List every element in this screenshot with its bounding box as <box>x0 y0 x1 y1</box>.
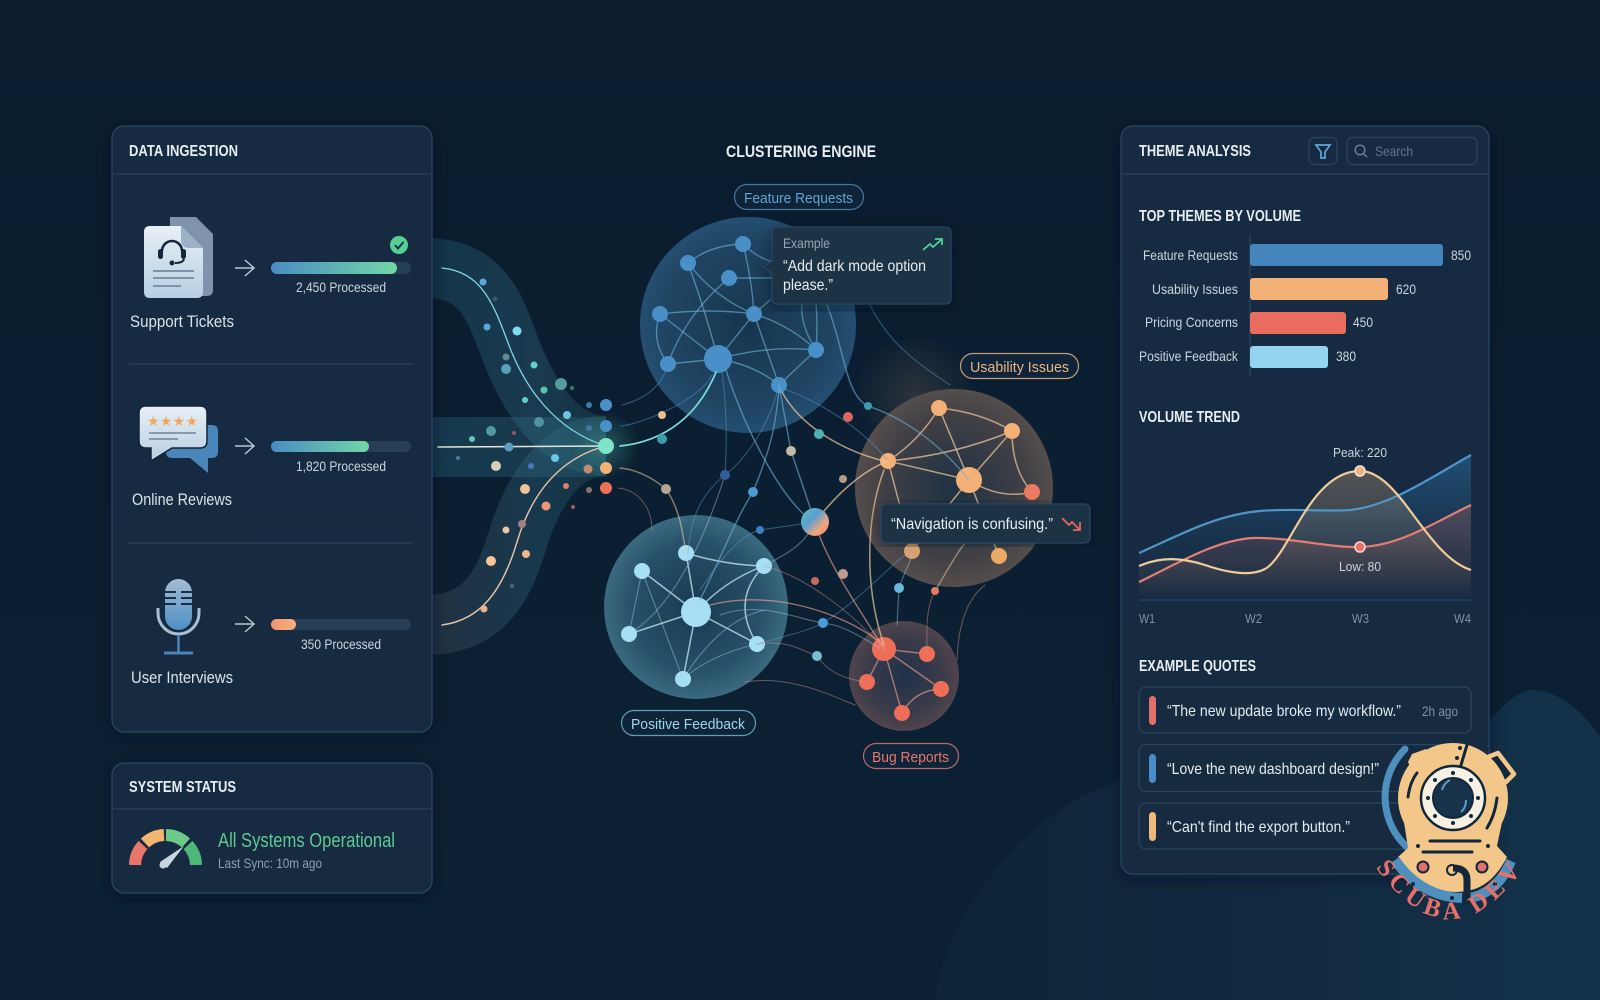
line chart: Peak: 220 <box>1333 445 1387 460</box>
quote card: export: “Can't find the export button.” <box>1167 819 1350 836</box>
callout: navigation quote: “Navigation is confusing.” <box>891 516 1053 533</box>
progress bar <box>271 441 411 452</box>
pill: feature requests: Feature Requests <box>744 190 853 207</box>
icon: trend down <box>1062 518 1080 530</box>
heading: volume trend: VOLUME TREND <box>1139 409 1240 426</box>
connecting links <box>618 305 985 705</box>
count: 2,450 Processed <box>296 279 386 295</box>
quote card: workflow: 2h ago <box>1422 703 1458 719</box>
heading: system status: SYSTEM STATUS <box>129 779 236 796</box>
icon: review bubbles <box>139 406 218 473</box>
heading: example quotes: EXAMPLE QUOTES <box>1139 658 1256 675</box>
progress bar <box>271 262 411 274</box>
pill: positive feedback: Positive Feedback <box>631 716 745 733</box>
callout: navigation quote <box>881 504 1090 543</box>
line chart: Low: 80 <box>1339 559 1381 574</box>
panel: data ingestion <box>112 126 432 732</box>
line chart: W3 <box>1352 611 1369 626</box>
bar chart <box>1139 235 1471 377</box>
pill: feature requests <box>734 184 864 210</box>
panel: system status <box>112 763 432 893</box>
callout: example quote: “Add dark mode option <box>783 258 926 275</box>
label: Online Reviews <box>132 490 232 509</box>
line chart <box>1139 445 1471 626</box>
status text: All Systems Operational <box>218 830 395 852</box>
callout: example quote: Example <box>783 235 830 251</box>
status check icon <box>390 236 408 254</box>
quote card: workflow <box>1139 687 1471 733</box>
bar chart: 380 <box>1336 348 1356 364</box>
search box <box>1347 138 1477 164</box>
heading: top themes: TOP THEMES BY VOLUME <box>1139 208 1301 225</box>
quote card: dashboard: “Love the new dashboard design!” <box>1167 761 1379 778</box>
cluster: usability issues <box>855 335 1053 587</box>
callout: example quote <box>764 227 951 304</box>
quote card: dashboard <box>1139 744 1471 792</box>
bar chart: 620 <box>1396 281 1416 297</box>
label: User Interviews <box>131 668 233 687</box>
source: support tickets <box>130 217 411 331</box>
icon: trend up <box>923 239 942 250</box>
logo: scuba dev helmet <box>1377 743 1516 920</box>
arrow <box>235 260 254 276</box>
cluster: positive feedback <box>604 475 788 699</box>
bar chart: 450 <box>1353 314 1373 330</box>
bar chart: Pricing Concerns <box>1145 314 1238 330</box>
pill: usability issues <box>960 354 1078 378</box>
count: 350 Processed <box>301 636 381 652</box>
label: Support Tickets <box>130 312 234 331</box>
filter button <box>1309 138 1337 164</box>
line chart: W1 <box>1139 611 1155 626</box>
bar chart: Feature Requests <box>1143 247 1238 263</box>
line chart: W4 <box>1454 611 1471 626</box>
icon: gauge <box>135 835 196 868</box>
pill: usability issues: Usability Issues <box>970 359 1069 376</box>
bar chart: 850 <box>1451 247 1471 263</box>
pill: bug reports: Bug Reports <box>872 749 949 766</box>
callout: example quote: please.” <box>783 277 833 294</box>
heading: data ingestion: DATA INGESTION <box>129 143 238 160</box>
source: online reviews <box>132 406 411 509</box>
multicolor junction node <box>801 508 829 536</box>
search box: Search <box>1375 143 1413 159</box>
bar chart: Usability Issues <box>1152 281 1238 297</box>
pill: positive feedback <box>622 710 756 736</box>
bar chart: Positive Feedback <box>1139 348 1239 364</box>
panel: theme analysis <box>1121 126 1489 874</box>
quote card: workflow: “The new update broke my workflow.” <box>1167 703 1401 720</box>
cluster: bug reports <box>849 621 959 731</box>
arrow <box>235 616 254 632</box>
quote card: export <box>1139 803 1471 849</box>
title: clustering engine: CLUSTERING ENGINE <box>726 142 876 161</box>
icon: document with headset <box>144 217 213 298</box>
logo: scuba dev helmet: SCUBA DEV <box>1377 860 1516 920</box>
data flow ribbons <box>425 268 640 625</box>
link nodes <box>598 399 939 661</box>
heading: theme analysis: THEME ANALYSIS <box>1139 143 1251 160</box>
network graph <box>598 217 1053 731</box>
line chart: W2 <box>1245 611 1262 626</box>
cluster: feature requests <box>622 217 856 433</box>
icon: review bubbles: ★★★★ <box>147 413 198 429</box>
source: user interviews <box>131 579 411 687</box>
count: 1,820 Processed <box>296 458 386 474</box>
icon: microphone <box>158 579 199 653</box>
progress bar <box>271 619 411 630</box>
last sync: Last Sync: 10m ago <box>218 855 322 871</box>
pill: bug reports <box>864 744 958 768</box>
arrow <box>235 438 254 454</box>
